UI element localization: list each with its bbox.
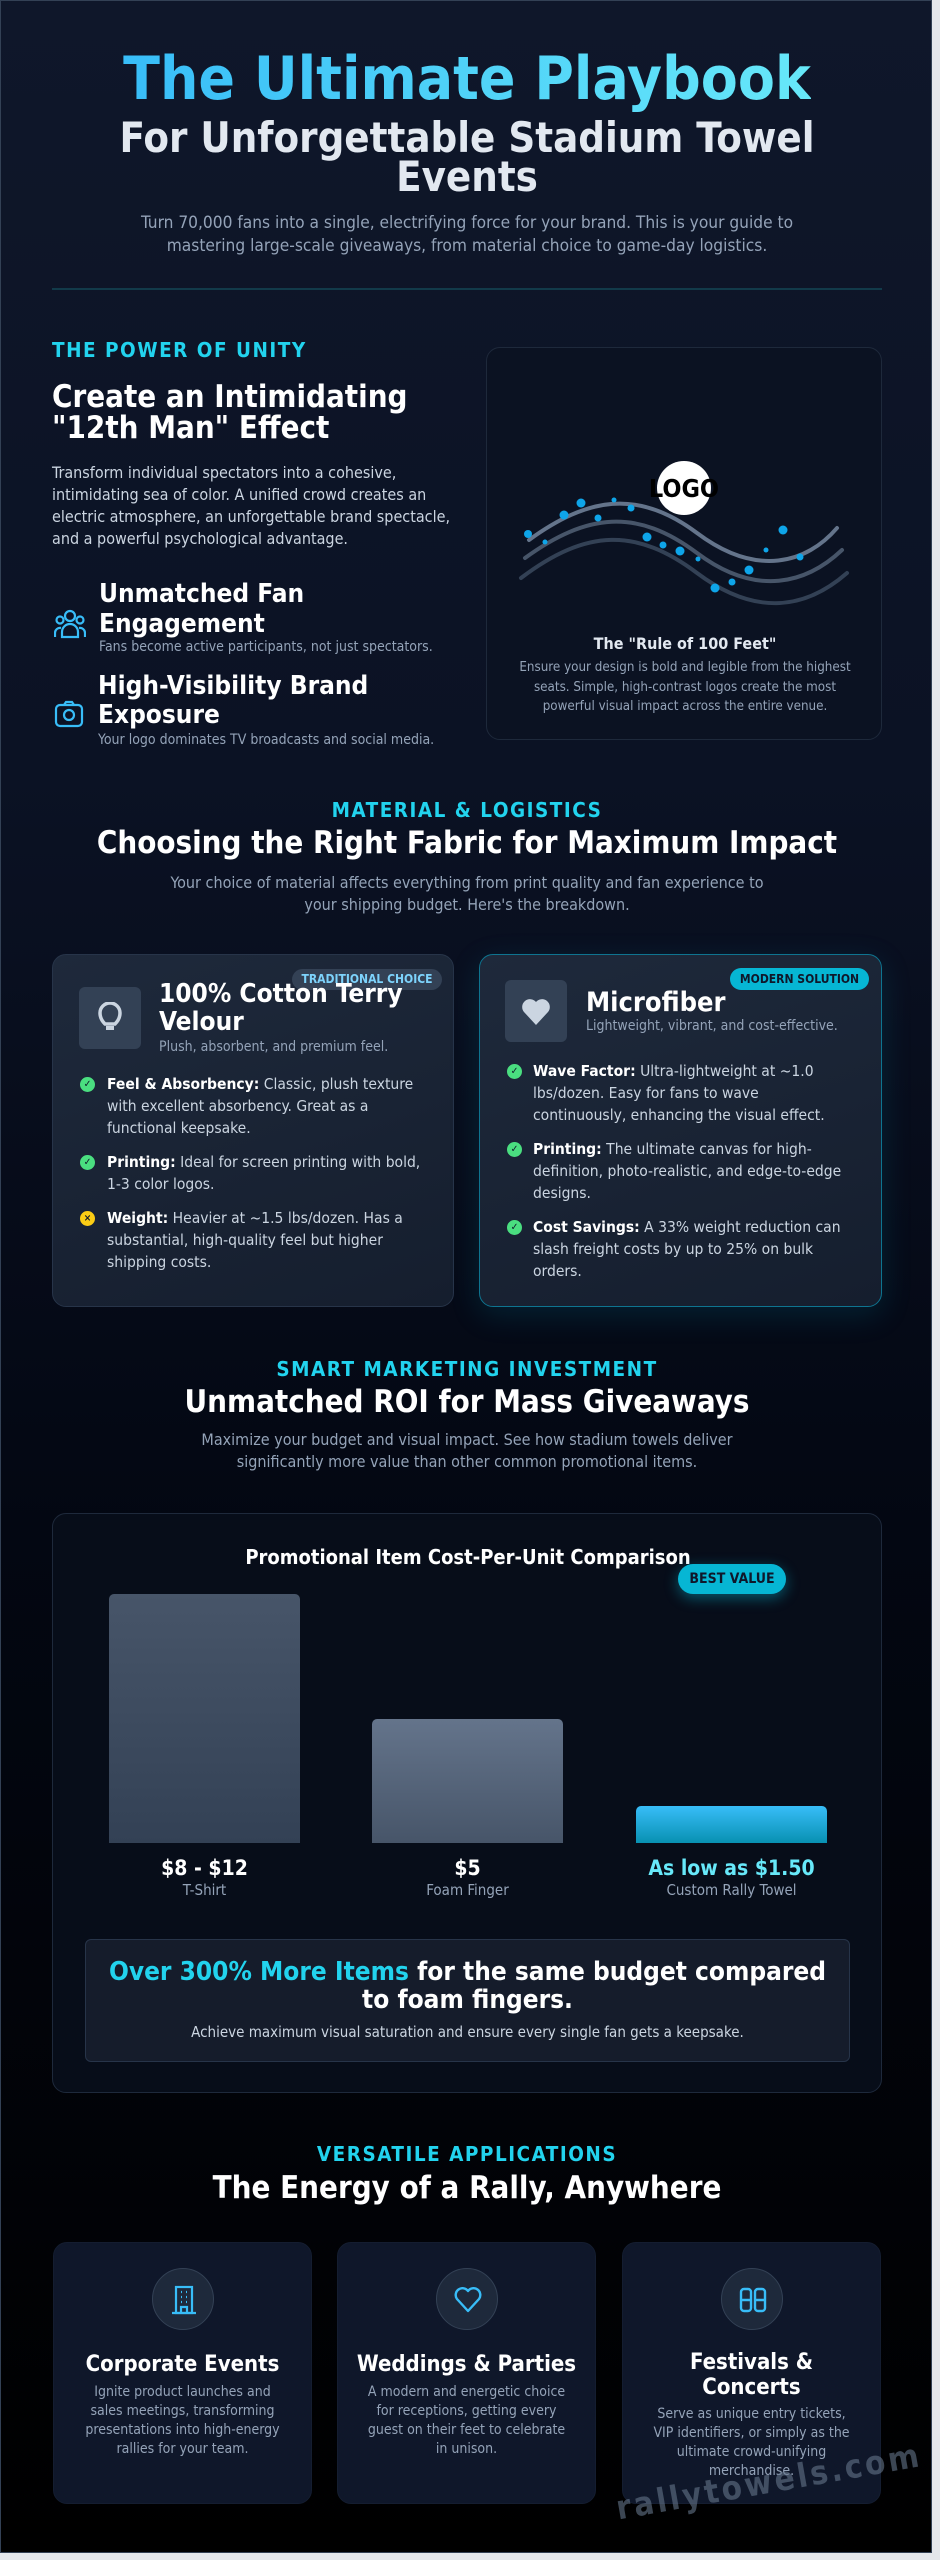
panel: microfiber card: ✓ [511, 1222, 518, 1233]
panel: microfiber card: Printing: The ultimate canvas for high-definition, photo-realistic, and edge-to-edge designs. [533, 1140, 841, 1202]
card: festivals: Concerts [702, 2375, 801, 2400]
logo badge [657, 461, 711, 515]
callout: Achieve maximum visual saturation and ensure every single fan gets a keepsake. [191, 2023, 744, 2041]
card: corporate: Ignite product launches and sales meetings, transforming presentations into high-energy rallies for your team. [85, 2384, 280, 2457]
icon: users [54, 610, 86, 638]
badge: modern: MODERN SOLUTION [740, 972, 859, 986]
callout: to foam fingers. [362, 1985, 573, 2015]
bar chart: As low as $1.50 [648, 1856, 815, 1880]
intro text [140, 213, 793, 256]
section header: material: Choosing the Right Fabric for Maximum Impact [97, 825, 837, 861]
card: weddings [337, 2242, 596, 2504]
bullets: ✓ [511, 1066, 518, 1077]
eyebrow: THE POWER OF UNITY [52, 338, 307, 362]
card title [159, 979, 403, 1037]
panel text: Ensure your design is bold and legible from the highest seats. Simple, high-contrast logos create the most powerful visual impact across the entire venue. [519, 660, 851, 714]
panel: microfiber card: Wave Factor: Ultra-lightweight at ~1.0 lbs/dozen. Easy for fans to wave continuously, enhancing the visual effect. [533, 1062, 825, 1124]
panel: cotton card: Printing: Ideal for screen printing with bold, 1-3 color logos. [107, 1153, 420, 1193]
badge: modern [730, 968, 869, 990]
title: The Ultimate Playbook [123, 44, 811, 114]
paragraph: Transform individual spectators into a cohesive, intimidating sea of color. A unified crowd creates an electric atmosphere, an unforgettable brand spectacle, and a powerful psychological advantage. [52, 463, 450, 548]
feature: fan engagement: Fans become active participants, not just spectators. [99, 639, 433, 655]
intro text: Turn 70,000 fans into a single, electrifying force for your brand. This is your guide to [141, 213, 793, 233]
section header: applications [212, 2142, 721, 2206]
section header: ROI: Unmatched ROI for Mass Giveaways [185, 1384, 749, 1420]
subtitle: Events [396, 152, 538, 201]
bar chart [109, 1560, 827, 1899]
panel: microfiber card: ✓ [511, 1144, 518, 1155]
illustration: crowd waves with logo: LOGO [649, 474, 719, 503]
feature: fan engagement [54, 579, 433, 655]
panel: cotton card: × [84, 1213, 91, 1224]
panel: cotton card: ✓ [84, 1157, 91, 1168]
icon: heart [505, 980, 567, 1042]
panel: microfiber card [479, 954, 882, 1307]
panel title: The "Rule of 100 Feet" [594, 634, 776, 653]
callout [85, 1939, 850, 2062]
panel: microfiber card: Lightweight, vibrant, and cost-effective. [586, 1018, 838, 1034]
heading: "12th Man" Effect [52, 410, 329, 446]
panel: cotton card [52, 954, 454, 1307]
feature: fan engagement: Unmatched Fan [99, 579, 304, 609]
bar chart: Foam Finger [426, 1881, 509, 1899]
bar chart: Custom Rally Towel [666, 1881, 797, 1899]
card: weddings: Weddings & Parties [357, 2352, 576, 2377]
icon: building [152, 2268, 214, 2330]
card: festivals [622, 2242, 881, 2504]
card title: Microfiber [586, 987, 725, 1018]
card: weddings: A modern and energetic choice for receptions, getting every guest on their feet to celebrate in unison. [368, 2384, 565, 2457]
feature: brand exposure [54, 671, 434, 748]
heading: Create an Intimidating [52, 379, 408, 415]
subtitle: For Unforgettable Stadium Towel [119, 113, 815, 162]
icon: camera [54, 700, 84, 728]
icon: tickets [720, 2268, 782, 2330]
feature: brand exposure: Exposure [98, 700, 220, 730]
card: corporate: Corporate Events [86, 2352, 279, 2377]
section header: applications: VERSATILE APPLICATIONS [317, 2142, 617, 2166]
heading [52, 379, 408, 446]
watermark: rallytowels.com [613, 2435, 925, 2527]
panel: cotton card: Feel & Absorbency: Classic, plush texture with excellent absorbency. Great as a functional keepsake. [107, 1075, 413, 1137]
bullets: ✓ [84, 1079, 91, 1090]
section: power of unity [52, 338, 450, 748]
section header: material: Your choice of material affects everything from print quality and fan experience to [170, 873, 764, 892]
subtitle [119, 113, 815, 201]
badge: traditional: TRADITIONAL CHOICE [301, 972, 433, 986]
panel: chart [52, 1513, 882, 2093]
callout: Over 300% More Items for the same budget compared [109, 1957, 826, 1987]
panel: cotton card: Plush, absorbent, and premium feel. [159, 1039, 388, 1055]
bullets [507, 1064, 522, 1079]
feature: brand exposure: High-Visibility Brand [98, 671, 368, 701]
card: corporate [53, 2242, 312, 2504]
illustration: crowd waves with logo [519, 461, 849, 606]
card title: Velour [159, 1007, 244, 1037]
badge: best value: BEST VALUE [689, 1571, 775, 1587]
section header: material: your shipping budget. Here's the breakdown. [304, 895, 630, 914]
section header: applications: The Energy of a Rally, Anywhere [213, 2170, 721, 2206]
icon: bulb [79, 987, 141, 1049]
section header: material [97, 798, 837, 914]
section header: ROI: Maximize your budget and visual impact. See how stadium towels deliver [201, 1430, 733, 1449]
section header: ROI: significantly more value than other common promotional items. [237, 1452, 697, 1471]
bar chart: $8 - $12 [161, 1856, 248, 1880]
bar chart: $5 [454, 1856, 481, 1880]
badge: best value [678, 1564, 786, 1594]
card: festivals: Festivals & [690, 2350, 813, 2375]
feature: brand exposure: Your logo dominates TV broadcasts and social media. [98, 732, 434, 748]
bullets [80, 1077, 95, 1092]
section header: material: MATERIAL & LOGISTICS [332, 798, 602, 822]
section header: ROI [185, 1357, 749, 1471]
bar chart: T-Shirt [183, 1881, 226, 1899]
panel: cotton card: Weight: Heavier at ~1.5 lbs/dozen. Has a substantial, high-quality feel but higher shipping costs. [107, 1209, 403, 1271]
badge: traditional [292, 969, 442, 990]
chart title: Promotional Item Cost-Per-Unit Comparison [245, 1545, 691, 1569]
card: festivals: Serve as unique entry tickets, VIP identifiers, or simply as the ultimate crowd-unifying merchandise. [653, 2406, 850, 2479]
icon: heart outline [436, 2268, 498, 2330]
panel: microfiber card: Cost Savings: A 33% weight reduction can slash freight costs by up to 25% on bulk orders. [533, 1218, 841, 1280]
panel: rule of 100 feet [486, 347, 882, 740]
card title: 100% Cotton Terry [159, 979, 403, 1009]
intro text: mastering large-scale giveaways, from material choice to game-day logistics. [167, 236, 767, 256]
feature: fan engagement: Engagement [99, 609, 265, 639]
section header: ROI: SMART MARKETING INVESTMENT [276, 1357, 658, 1381]
